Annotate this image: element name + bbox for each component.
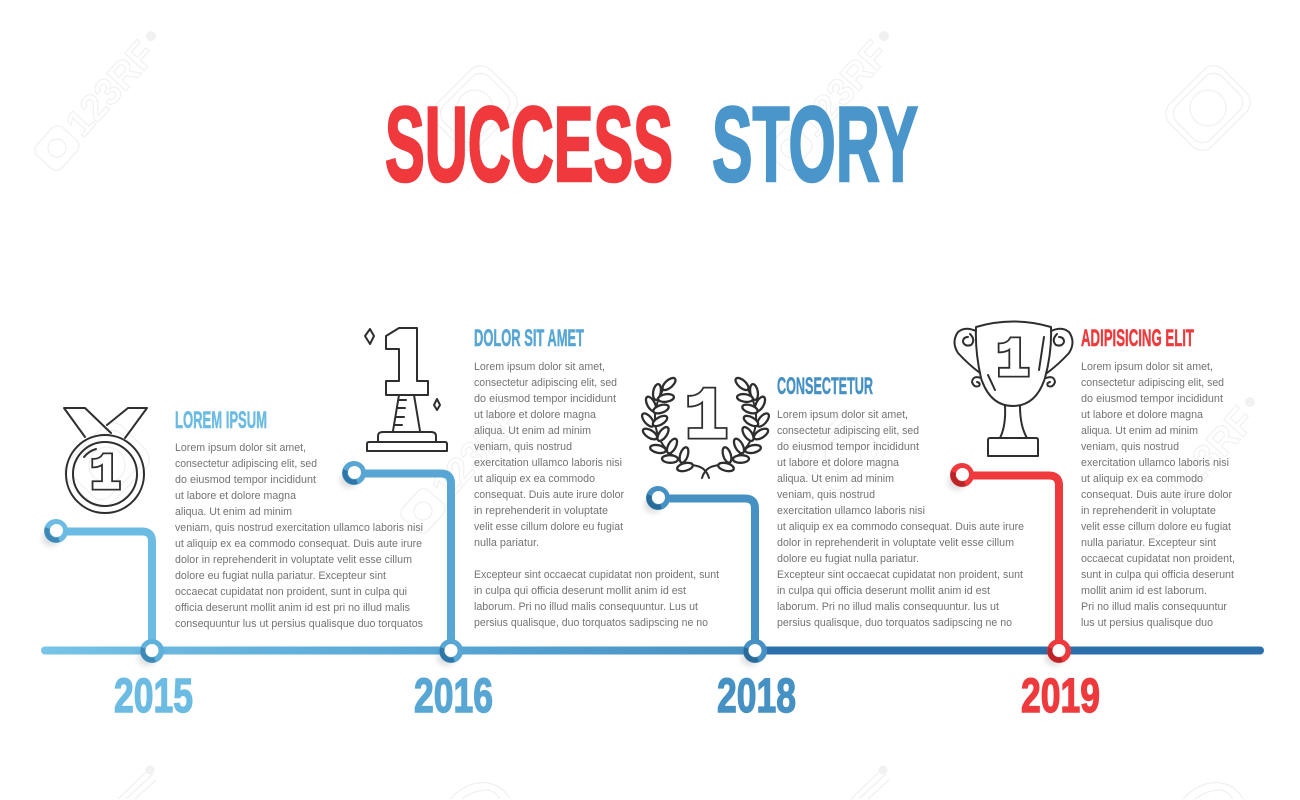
watermarks: 123RF <box>791 34 897 145</box>
text block: adipisicing elit <box>1081 361 1235 629</box>
text block: dolor sit amet: persius qualisque, duo torquatos sadipscing ne no <box>474 617 708 629</box>
text block: dolor sit amet: do eiusmod tempor incididunt <box>474 393 616 405</box>
text block: adipisicing elit: consectetur adipiscing elit, sed <box>1081 377 1224 389</box>
text block: lorem ipsum: officia deserunt mollit anim id est pri no illud malis <box>175 602 410 614</box>
text block: adipisicing elit: do eiusmod tempor incididunt <box>1081 393 1223 405</box>
text block: consectetur: aliqua. Ut enim ad minim <box>777 473 894 485</box>
text block: dolor sit amet: in culpa qui officia deserunt mollit anim id est <box>474 585 686 597</box>
text block: dolor sit amet: ut labore et dolore magna <box>474 409 597 421</box>
year labels: 2016 <box>414 670 493 723</box>
panel: adipisicing elit <box>1081 325 1235 629</box>
text block: consectetur: ut aliquip ex ea commodo consequat. Duis aute irure <box>777 521 1024 533</box>
text block: adipisicing elit: exercitation ullamco laboris nisi <box>1081 457 1229 469</box>
text block: adipisicing elit: in reprehenderit in voluptate <box>1081 505 1216 517</box>
text block: dolor sit amet: in reprehenderit in voluptate <box>474 505 608 517</box>
text block: lorem ipsum: consequuntur lus ut persius qualisque duo torquatos <box>175 618 423 630</box>
icon: trophy cup: 1 <box>996 329 1030 392</box>
timeline node 2018 <box>741 639 767 666</box>
text block: lorem ipsum: consectetur adipiscing elit, sed <box>175 458 317 470</box>
text block: adipisicing elit: veniam, quis nostrud <box>1081 441 1179 453</box>
icon: left cup handle <box>954 329 981 386</box>
text block: dolor sit amet: Lorem ipsum dolor sit amet, <box>474 361 605 373</box>
text block: dolor sit amet: velit esse cillum dolore eu fugiat <box>474 521 623 533</box>
text block: consectetur: exercitation ullamco laboris nisi <box>777 505 925 517</box>
text block: lorem ipsum: dolor in reprehenderit in voluptate velit esse cillum <box>175 554 412 566</box>
text block: dolor sit amet <box>474 361 719 629</box>
timeline node 2019 <box>1045 639 1071 666</box>
text block: dolor sit amet: nulla pariatur. <box>474 537 539 549</box>
text block: lorem ipsum: dolore eu fugiat nulla pariatur. Excepteur sint <box>175 570 386 582</box>
icon: laurel wreath: 1 <box>685 377 728 459</box>
icon: medal: 1 <box>90 447 121 504</box>
text block: lorem ipsum: do eiusmod tempor incididunt <box>175 474 316 486</box>
text block: consectetur: veniam, quis nostrud <box>777 489 875 501</box>
icon: laurel wreath: 1 <box>685 377 728 459</box>
watermarks: 123RF <box>1157 400 1263 511</box>
text block: lorem ipsum: Lorem ipsum dolor sit amet, <box>175 442 306 454</box>
text block: consectetur <box>777 409 1024 629</box>
text block: consectetur: ut labore et dolore magna <box>777 457 900 469</box>
text block: lorem ipsum <box>175 442 423 630</box>
watermarks: 123RF <box>424 397 530 508</box>
text block: adipisicing elit: ut labore et dolore magna <box>1081 409 1204 421</box>
icon: right laurel branch <box>702 376 771 478</box>
text block: dolor sit amet: consequat. Duis aute irure dolor <box>474 489 624 501</box>
text block: adipisicing elit: lus ut persius qualisque duo <box>1081 617 1213 629</box>
icon: chess trophy number one <box>365 328 447 451</box>
year labels <box>114 670 1100 723</box>
text block: consectetur: Excepteur sint occaecat cupidatat non proident, sunt <box>777 569 1023 581</box>
heading: adipisicing elit: ADIPISICING ELIT <box>1081 325 1194 352</box>
text block: consectetur: dolore eu fugiat nulla pariatur. <box>777 553 919 565</box>
icon: trophy cup <box>954 322 1072 456</box>
text block: dolor sit amet: Excepteur sint occaecat cupidatat non proident, sunt <box>474 569 719 581</box>
text block: lorem ipsum: ut aliquip ex ea commodo consequat. Duis aute irure <box>175 538 422 550</box>
text block: adipisicing elit: Pri no illud malis consequuntur <box>1081 601 1227 613</box>
icon: trophy cup: 1 <box>996 329 1030 392</box>
text block: adipisicing elit: sunt in culpa qui officia deserunt <box>1081 569 1234 581</box>
text block: dolor sit amet: ut aliquip ex ea commodo <box>474 473 595 485</box>
text block: lorem ipsum: veniam, quis nostrud exercitation ullamco laboris nisi <box>175 522 423 534</box>
text block: dolor sit amet: veniam, quis nostrud <box>474 441 572 453</box>
timeline base line <box>45 646 1260 654</box>
icon: right cup handle <box>1046 329 1072 386</box>
year labels: 2018 <box>717 670 796 723</box>
text block: adipisicing elit: nulla pariatur. Excepteur sint <box>1081 537 1216 549</box>
text block: adipisicing elit: velit esse cillum dolore eu fugiat <box>1081 521 1231 533</box>
step connector 2015 <box>42 519 152 650</box>
timeline node 2016 <box>437 639 463 666</box>
text block: consectetur: dolor in reprehenderit in voluptate velit esse cillum <box>777 537 1014 549</box>
year labels: 2015 <box>114 670 193 723</box>
title: SUCCESS <box>385 84 673 204</box>
text block: adipisicing elit: ut aliquip ex ea commodo <box>1081 473 1203 485</box>
text block: dolor sit amet: laborum. Pri no illud malis consequuntur. Lus ut <box>474 601 698 613</box>
step connector 2016 <box>340 461 451 650</box>
text block: consectetur: Lorem ipsum dolor sit amet, <box>777 409 908 421</box>
panel: lorem ipsum <box>175 407 423 630</box>
step connector 2019 <box>948 463 1059 650</box>
text block: consectetur: consectetur adipiscing elit, sed <box>777 425 919 437</box>
text block: adipisicing elit: consequat. Duis aute irure dolor <box>1081 489 1232 501</box>
text block: dolor sit amet: aliqua. Ut enim ad minim <box>474 425 591 437</box>
timeline node 2015 <box>138 639 164 666</box>
title: STORY <box>712 84 918 204</box>
icon: laurel wreath <box>640 376 771 478</box>
text block: lorem ipsum: aliqua. Ut enim ad minim <box>175 506 292 518</box>
text block: dolor sit amet: exercitation ullamco laboris nisi <box>474 457 622 469</box>
year labels: 2019 <box>1021 670 1100 723</box>
text block: lorem ipsum: occaecat cupidatat non proident, sunt in culpa qui <box>175 586 407 598</box>
panel: consectetur <box>777 373 1024 629</box>
panel: dolor sit amet <box>474 325 719 629</box>
text block: consectetur: in culpa qui officia deserunt mollit anim id est <box>777 585 990 597</box>
heading: consectetur: CONSECTETUR <box>777 373 873 400</box>
text block: lorem ipsum: ut labore et dolore magna <box>175 490 297 502</box>
text block: adipisicing elit: mollit anim id est laborum. <box>1081 585 1207 597</box>
step connector 2018 <box>644 486 755 650</box>
text block: adipisicing elit: Lorem ipsum dolor sit amet, <box>1081 361 1213 373</box>
text block: consectetur: do eiusmod tempor incididunt <box>777 441 919 453</box>
heading: lorem ipsum: LOREM IPSUM <box>175 407 267 434</box>
heading: dolor sit amet: DOLOR SIT AMET <box>474 325 584 352</box>
text block: adipisicing elit: aliqua. Ut enim ad minim <box>1081 425 1198 437</box>
text block: dolor sit amet: consectetur adipiscing elit, sed <box>474 377 617 389</box>
icon: left laurel branch <box>640 376 709 478</box>
icon: medal <box>64 408 147 513</box>
text block: consectetur: laborum. Pri no illud malis consequuntur. lus ut <box>777 601 999 613</box>
text block: adipisicing elit: occaecat cupidatat non proident, <box>1081 553 1235 565</box>
watermarks: 123RF <box>58 34 164 145</box>
icon: medal: 1 <box>90 447 121 504</box>
text block: consectetur: persius qualisque, duo torquatos sadipscing ne no <box>777 617 1012 629</box>
